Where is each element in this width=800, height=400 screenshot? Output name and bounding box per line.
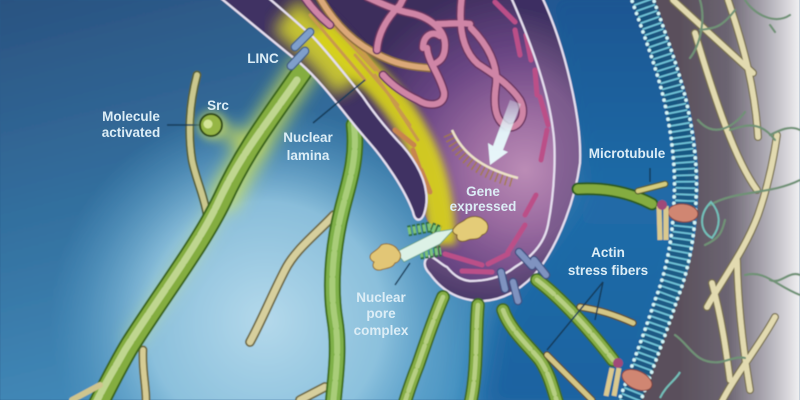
icon: LINC pair two — [519, 252, 546, 275]
chromatin strands — [303, 0, 523, 127]
fiber: main green actin fiber — [72, 72, 302, 400]
glow: yellow force path across the envelope top — [285, 15, 352, 85]
label: Actin stress fibers: Actin — [591, 245, 625, 260]
mRNA clumps — [370, 216, 488, 270]
label: Nuclear pore complex: complex — [354, 323, 409, 338]
LINC proteins, bottom — [501, 252, 546, 301]
label: Molecule activated: activated — [102, 125, 160, 140]
pore: nuclear pore complex — [408, 227, 441, 254]
panel: cell cortex, grey region at right — [640, 0, 800, 400]
label: LINC: LINC — [247, 51, 279, 66]
label: Gene expressed: Gene — [466, 184, 500, 199]
fiber: tan filament near Src — [143, 75, 207, 400]
leader: lines for labels — [167, 80, 650, 350]
filaments: thin green-grey branching strands — [675, 0, 800, 362]
lamina filaments, pink, right side — [445, 2, 548, 272]
LINC proteins, top — [291, 32, 310, 66]
label: Gene expressed: expressed — [450, 199, 516, 214]
panel: dark lamina lobe along upper left of the nucleus — [217, 0, 427, 220]
glow: activation path around actin fiber — [130, 60, 310, 345]
icon: tan stems — [659, 206, 666, 240]
icon: LINC lower — [291, 51, 305, 66]
label: Actin stress fibers: stress fibers — [568, 263, 648, 278]
label: Nuclear pore complex: Nuclear — [356, 290, 406, 305]
label: Microtubule: Microtubule — [589, 146, 666, 161]
fiber: second green actin fiber with tan branch — [250, 125, 355, 400]
arrow: export through pore — [396, 229, 454, 262]
membrane: cell membrane dotted ladder band — [617, 0, 697, 400]
arrow: white gene activation arrow — [488, 100, 521, 165]
icon: magenta linker — [657, 200, 667, 210]
label: Nuclear lamina: Nuclear — [283, 130, 333, 145]
envelope lines: white nuclear membranes — [217, 0, 580, 301]
icon: pink receptor — [619, 365, 655, 395]
icon: LINC pair one — [501, 272, 518, 301]
lamina filaments, orange, left side — [310, 15, 418, 140]
lamina filaments, orange blocks along yellow band — [395, 130, 430, 192]
fibers: lower green actin bundles — [404, 280, 633, 400]
glow: yellow force path inside the nucleus — [320, 30, 442, 245]
panel: nucleus interior — [265, 0, 555, 281]
gene strand — [449, 130, 518, 182]
panel: nuclear contents, clipped — [303, 0, 548, 272]
anchor: lower integrin complex — [606, 358, 655, 396]
label: Nuclear pore complex: pore — [366, 306, 396, 321]
icon: LINC upper — [295, 32, 310, 47]
icon: magenta linker — [613, 358, 623, 368]
icon: vesicle ellipses near membrane — [660, 202, 719, 398]
fiber: upper right green fiber to microtubule anchor — [578, 184, 665, 204]
label: Nuclear lamina: lamina — [287, 148, 330, 163]
label: Src: Src — [207, 98, 229, 113]
clump: inside pore — [453, 216, 488, 241]
filaments: tan cytoskeleton at right — [673, 0, 777, 400]
icon: tan stems — [606, 368, 619, 396]
icon: pink receptor — [667, 203, 699, 223]
label: Molecule activated: Molecule — [102, 109, 160, 124]
anchor: upper integrin complex — [657, 200, 699, 240]
clump: outside pore — [370, 244, 401, 270]
icon: Src molecule — [196, 110, 226, 140]
panel: nucleus outer envelope — [217, 0, 580, 301]
